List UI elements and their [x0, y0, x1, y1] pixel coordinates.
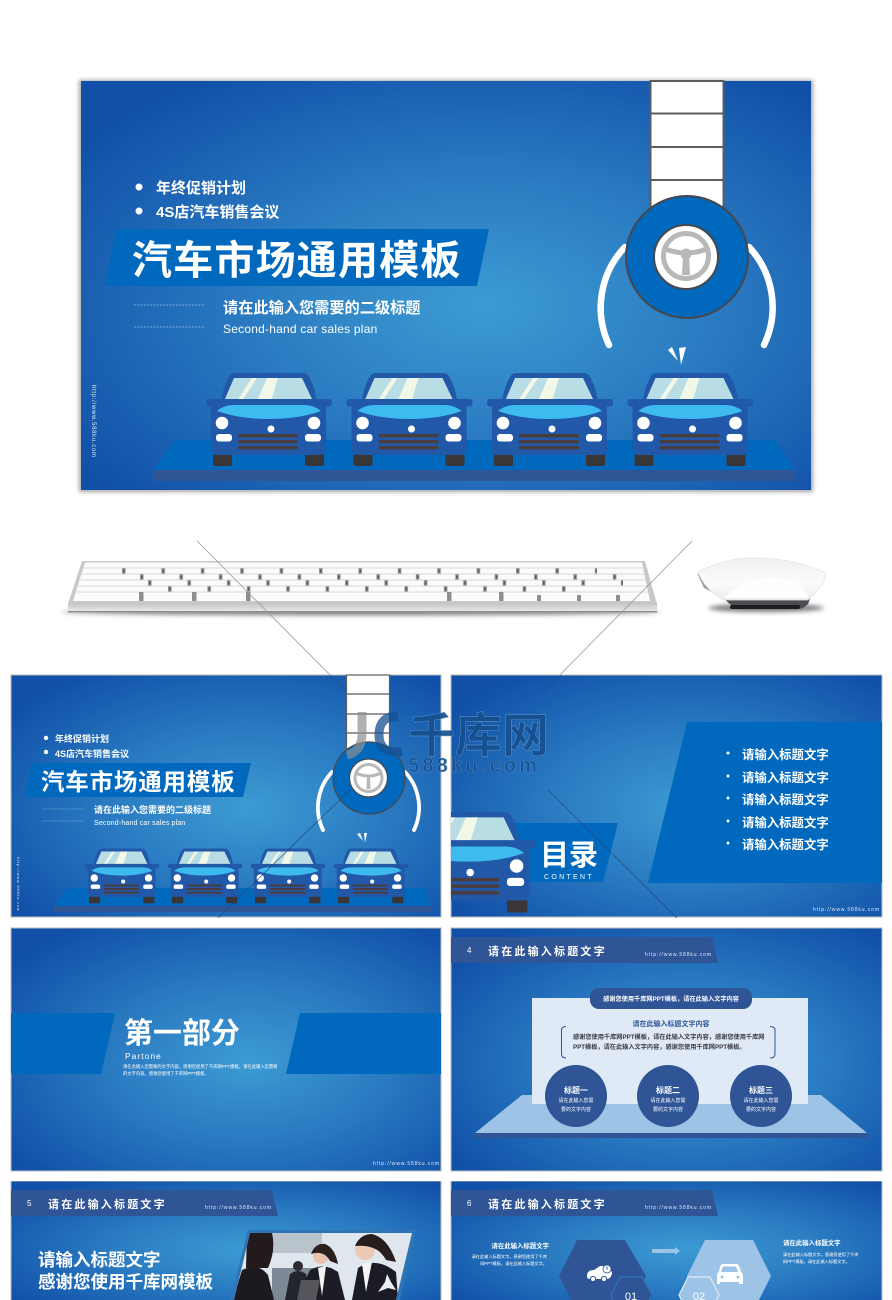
hexagon 2 — [687, 1240, 771, 1300]
slide 3: section one — [11, 928, 441, 1171]
right text: 请在此输入标题文字。感谢您使用了千库 — [783, 1251, 858, 1258]
right text: 请在此输入标题文字 — [783, 1238, 841, 1247]
vertical url: http://www.588ku.com — [90, 385, 96, 458]
watermark url: 588ku.com — [408, 755, 540, 777]
icon: car front — [717, 1264, 743, 1284]
text block: PPT模板，请在此输入文字内容，感谢您使用千库网PPT模板。 — [573, 1043, 746, 1051]
vertical url: http://www.588ku.com — [16, 857, 20, 912]
pill heading: 感谢您使用千库网PPT模板，请在此输入文字内容 — [603, 995, 739, 1003]
title banner — [105, 229, 489, 286]
platform — [153, 440, 795, 481]
car 4 — [334, 848, 408, 903]
badge 01 — [611, 1277, 652, 1300]
header bar: 请在此输入标题文字 — [48, 1197, 167, 1211]
gauge arcs — [601, 247, 773, 345]
car 2 — [346, 373, 472, 466]
diagonal line — [218, 675, 350, 918]
car 3 — [251, 848, 325, 903]
subtitle: 请在此输入您需要的二级标题 — [94, 804, 211, 815]
bullet list: 年终促销计划 — [156, 179, 246, 197]
photo frame — [230, 1230, 416, 1300]
header bar: 请在此输入标题文字 — [488, 1197, 607, 1211]
watermark — [347, 709, 549, 777]
contents list: 请输入标题文字 — [742, 747, 829, 762]
section text — [123, 1063, 278, 1077]
header bar: 4 — [467, 946, 472, 955]
url: http://www.588ku.com — [813, 907, 880, 913]
ladder — [650, 81, 724, 211]
subtitle: Second-hand car sales plan — [223, 322, 377, 336]
bullet list: 4S店汽车销售会议 — [55, 748, 129, 759]
gauge arcs — [318, 772, 419, 830]
pointer — [668, 347, 686, 365]
slide 2: contents — [450, 674, 882, 918]
reflection lines — [197, 541, 692, 690]
platform — [475, 1095, 867, 1138]
mouse — [697, 558, 826, 612]
section text: 的文字内容。感谢您使用了千库网PPT模板。 — [123, 1070, 209, 1077]
topic circle 3 — [730, 1065, 792, 1127]
subtitle: 请在此输入您需要的二级标题 — [223, 299, 420, 317]
title: 汽车市场通用模板 — [132, 239, 462, 283]
contents panel — [648, 722, 882, 883]
section text: 请在此输入您需要的文字内容。感谢您使用了千库网PPT模板，请在此输入您需要 — [123, 1063, 278, 1070]
topic circle 1: 标题一 — [564, 1085, 588, 1095]
right text — [783, 1238, 858, 1265]
car 3 — [487, 373, 613, 466]
keyboard — [61, 561, 661, 615]
url: http://www.588ku.com — [373, 1161, 440, 1167]
subtitle — [134, 299, 420, 336]
icon: car with alert — [587, 1265, 612, 1282]
section english: Partone — [125, 1051, 162, 1061]
topic circle 2: 要的文字内容 — [653, 1106, 683, 1113]
platform — [54, 888, 431, 912]
topic circle 2: 标题二 — [656, 1085, 680, 1095]
topic circle 3: 请在此输入您需 — [743, 1097, 779, 1104]
slide 5: text and photo — [11, 1181, 441, 1300]
title banner — [25, 763, 251, 797]
header bar — [451, 937, 718, 963]
topic circle 3: 标题三 — [749, 1085, 773, 1095]
watermark name: 千库网 — [408, 709, 549, 762]
topic circle 2: 请在此输入您需 — [650, 1097, 686, 1104]
heading english: CONTENT — [544, 874, 594, 881]
topic circle 3: 要的文字内容 — [746, 1106, 776, 1113]
photo: office meeting — [230, 1233, 420, 1300]
heading: 目录 — [540, 840, 598, 872]
bullet list — [136, 179, 279, 221]
slide 6: hexagon process — [451, 1181, 882, 1300]
header bar — [451, 1190, 718, 1216]
text block: 请在此输入标题文字内容 — [632, 1019, 710, 1028]
car 1 — [206, 373, 332, 466]
contents list: 请输入标题文字 — [742, 815, 829, 830]
right text: 网PPT模板，请在此输入标题文字。 — [783, 1258, 850, 1265]
car 2 — [168, 848, 242, 903]
text block: 感谢您使用千库网PPT模板，请在此输入文字内容，感谢您使用千库网 — [573, 1033, 764, 1041]
header bar — [11, 1190, 278, 1216]
topic circle 1 — [545, 1065, 607, 1127]
body heading — [38, 1250, 213, 1292]
title: 汽车市场通用模板 — [41, 769, 235, 795]
left text: 请在此输入标题文字。感谢您使用了千库 — [472, 1253, 547, 1260]
slide 1: cover thumbnail — [11, 675, 441, 918]
topic circle 1: 请在此输入您需 — [558, 1097, 594, 1104]
badge 02 — [679, 1277, 719, 1300]
hexagon 1 — [559, 1240, 646, 1300]
watermark logo — [347, 712, 402, 755]
body heading: 感谢您使用千库网模板 — [38, 1272, 213, 1292]
left band — [11, 1013, 115, 1074]
car 1 — [85, 848, 159, 903]
pointer — [357, 833, 367, 843]
contents list — [726, 747, 829, 852]
section title: 第一部分 — [124, 1017, 240, 1050]
right band — [286, 1013, 441, 1074]
header bar: http://www.588ku.com — [205, 1205, 272, 1211]
topic circle 2 — [637, 1065, 699, 1127]
ladder — [346, 675, 390, 751]
bullet list: 年终促销计划 — [55, 733, 109, 744]
left text: 网PPT模板，请在此输入标题文字。 — [480, 1260, 547, 1267]
subtitle — [42, 804, 211, 827]
body heading: 请输入标题文字 — [38, 1250, 160, 1270]
left text — [472, 1241, 549, 1267]
header bar: http://www.588ku.com — [645, 1205, 712, 1211]
slide 4: three topics — [451, 928, 882, 1171]
topic circle 1: 要的文字内容 — [561, 1106, 591, 1113]
car — [451, 812, 536, 912]
heading banner — [500, 823, 618, 882]
light panel — [532, 998, 808, 1104]
header bar: http://www.588ku.com — [645, 952, 712, 958]
header bar: 6 — [467, 1199, 472, 1208]
text block — [562, 1019, 775, 1058]
bullet list: 4S店汽车销售会议 — [156, 203, 279, 221]
left text: 请在此输入标题文字 — [491, 1241, 549, 1250]
bullet list — [44, 733, 129, 759]
arrow — [652, 1247, 680, 1255]
header bar: 请在此输入标题文字 — [488, 944, 607, 958]
contents list: 请输入标题文字 — [742, 770, 829, 785]
subtitle: Second-hand car sales plan — [94, 820, 185, 827]
contents list: 请输入标题文字 — [742, 837, 829, 852]
steering wheel dial — [626, 196, 748, 318]
car 4 — [628, 373, 754, 466]
diagonal line — [545, 675, 677, 918]
header bar: 5 — [27, 1199, 32, 1208]
pill heading — [590, 988, 752, 1009]
main slide: cover — [79, 80, 813, 492]
contents list: 请输入标题文字 — [742, 792, 829, 807]
steering wheel dial — [333, 742, 405, 814]
